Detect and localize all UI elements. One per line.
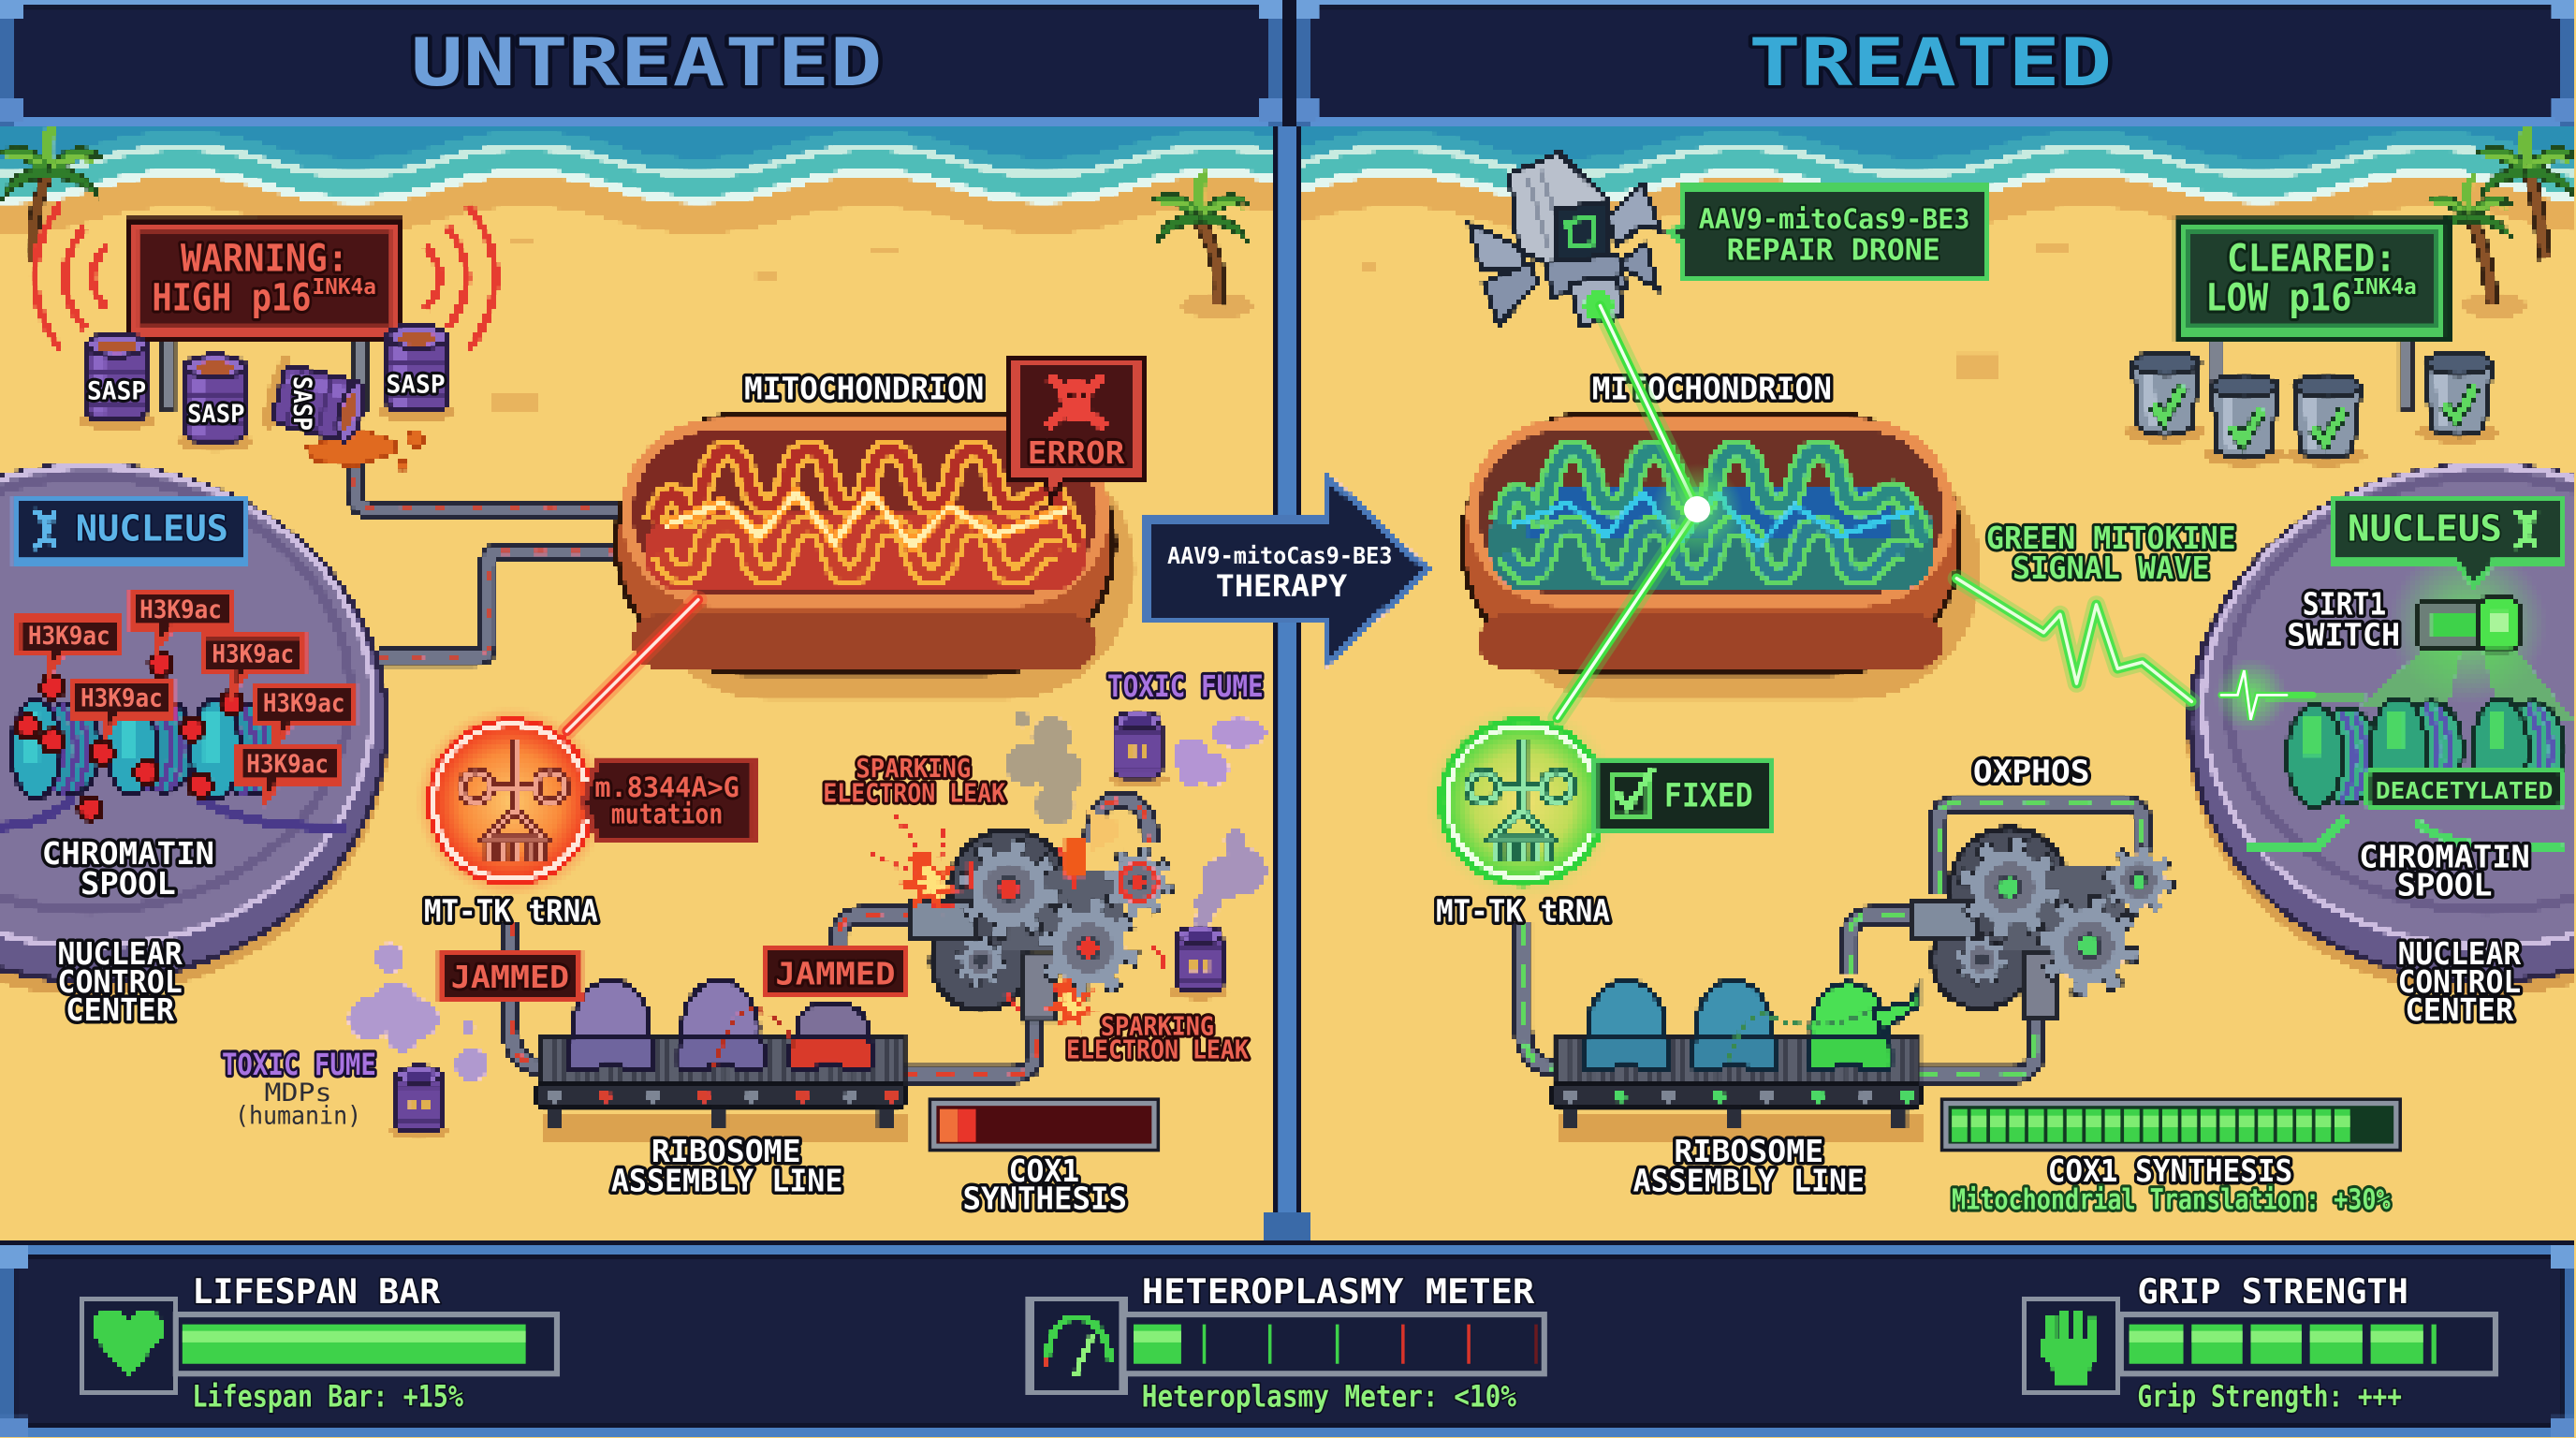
chromatin spools right [2247,698,2565,849]
repair drone label [1669,187,1986,279]
cleared sign text: CLEARED: [2227,237,2396,281]
fixed badge [1595,759,1771,829]
palm tree right of untreated beach [1151,169,1253,318]
nucleus label text right: NUCLEUS [2348,507,2502,550]
MT-TK label right: MT-TK tRNA [1436,893,1610,930]
SASP barrels [77,326,457,453]
ribosome label right: ASSEMBLY LINE [1633,1162,1865,1198]
red warning signal arcs [35,204,495,350]
palm tree top left [0,122,102,263]
chromatin spool label left: CHROMATIN [42,835,214,872]
SASP barrel labels: SASP [386,371,446,399]
H3K9ac labels: H3K9ac [28,623,110,651]
ribosome label right: RIBOSOME [1674,1133,1823,1169]
fixed label: FIXED [1664,777,1753,815]
signal pulse inside nucleus [2221,670,2313,720]
grip strength bar [2121,1314,2496,1373]
SASP barrel labels [87,371,446,431]
ribosome assembly conveyor right [1551,1036,1924,1144]
toxic fume MDPs label left: MDPs [265,1079,332,1108]
toxic fume MDPs label left [222,1049,376,1130]
ribosome assembly conveyor left [535,1036,909,1144]
nuclear control center label left: CENTER [66,991,175,1028]
ribosome label left: ASSEMBLY LINE [611,1162,842,1198]
gear output pipes left [840,800,1150,1075]
jammed badge two [766,948,907,996]
H3K9ac labels: H3K9ac [80,685,163,713]
H3K9ac labels [28,596,345,779]
green mitokine label [1986,520,2236,586]
SIRT1 green beams [2215,546,2576,731]
sparking electron leak label bottom [1066,1013,1249,1064]
lifespan text: Lifespan Bar: +15% [192,1380,463,1414]
repaired tRNA circle [1425,703,1621,901]
heteroplasmy text: HETEROPLASMY METER [1142,1271,1535,1312]
nucleus label left [15,498,245,562]
left header banner [0,0,1288,128]
red damage on gears [929,846,1157,1010]
green mitokine label: SIGNAL WAVE [2012,550,2210,586]
cleared sign text: INK4a [2352,275,2417,300]
toxic fume barrel and clouds left [348,943,488,1139]
therapy text: AAV9-mitoCas9-BE3 [1167,542,1392,569]
jammed labels: JAMMED [451,959,569,995]
SIRT1 switch label: SWITCH [2287,617,2400,653]
ocean and surf, untreated side [0,126,1273,234]
sparking electron leak label top [823,755,1006,808]
nucleus dome right [2187,465,2576,996]
jammed labels: JAMMED [775,955,896,991]
centre divider [1265,128,1311,1245]
sparking electron leak label top: ELECTRON LEAK [823,779,1006,808]
COX1 synthesis label right: Mitochondrial Translation: +30% [1952,1184,2391,1217]
ribosome label left: RIBOSOME [651,1133,801,1169]
cleared buckets [2124,352,2499,466]
nuclear control center label left: CONTROL [57,963,183,1000]
lifespan text: LIFESPAN BAR [192,1271,441,1312]
grip strength text [2137,1271,2408,1414]
toxic fume barrel and smoke right [1170,829,1266,1000]
nucleus label right [2333,498,2563,585]
jammed badge one [440,951,580,999]
green mitokine label: GREEN MITOKINE [1986,520,2236,556]
H3K9ac labels: H3K9ac [246,751,329,779]
nuclear control center label right: CENTER [2405,991,2514,1028]
repair impact flash [1651,463,1743,555]
H3K9ac labels: H3K9ac [139,596,222,624]
therapy text: THERAPY [1216,568,1348,604]
green mitokine signal wave [1956,579,2191,701]
sparking electron leak burst top [871,814,964,915]
heading treated: TREATED [1749,24,2112,101]
green repair beam to tRNA [1558,509,1697,718]
mitochondrion label right: MITOCHONDRION [1592,370,1832,406]
nuclear control center label right: NUCLEAR [2398,935,2522,972]
drone label text: AAV9-mitoCas9-BE3 [1699,203,1969,235]
SASP pipe to mitochondrion [355,463,618,509]
warning sign text [152,237,376,320]
grip strength text: Grip Strength: +++ [2137,1380,2402,1414]
SASP barrel labels: SASP [187,401,245,429]
SASP barrel labels: SASP [87,377,146,405]
tRNA pipe to ribosomes left [511,923,550,1068]
heart icon [82,1299,176,1392]
warning sign text: INK4a [312,275,376,300]
lifespan bar [176,1314,557,1373]
error label: ERROR [1028,434,1125,471]
chromatin spool label left: SPOOL [80,865,176,902]
heteroplasmy text [1142,1271,1535,1414]
gear cluster right [1910,829,2168,1019]
crisp status bars layer [176,1099,2496,1373]
nuclear control center label right: CONTROL [2398,963,2521,1000]
therapy arrow [1147,477,1427,662]
oxphos pipes right [1850,803,2143,1075]
heteroplasmy bar [1123,1314,1544,1373]
tRNA pipe to ribosomes right [1523,923,1560,1068]
jammed labels [451,955,896,995]
COX1 synthesis label right: COX1 SYNTHESIS [2048,1152,2292,1189]
warning sign text: HIGH p16 [152,276,312,320]
heteroplasmy text: Heteroplasmy Meter: <10% [1142,1380,1516,1414]
repair drone [1469,153,1661,326]
SIRT1 toggle switch [2417,598,2520,651]
mutation label [594,771,739,829]
warning sign text: WARNING: [181,237,348,281]
chromatin spool label right [2359,839,2530,903]
H3K9ac tag bubbles [18,592,355,801]
drone label text: REPAIR DRONE [1727,233,1940,267]
SIRT1 switch label: SIRT1 [2303,585,2386,622]
gear cluster left [910,829,1167,1020]
nucleus dome left [0,465,389,996]
drone label text [1699,203,1969,267]
ribosomes right [1584,979,1919,1070]
ribosome label right [1633,1133,1865,1198]
sparking electron leak label bottom: SPARKING [1101,1013,1214,1042]
sand specks [493,238,2070,411]
nuclear control center label left [57,935,183,1028]
lifespan text [192,1271,463,1414]
mutation label: mutation [611,798,723,829]
COX1 label left [962,1152,1127,1217]
heading untreated: UNTREATED [411,24,882,101]
MT-TK label left: MT-TK tRNA [424,893,598,930]
cleared sign posts [2210,335,2413,411]
mutation label: m.8344A>G [594,771,739,803]
orange sparking fire [1064,809,1120,877]
grip strength text: GRIP STRENGTH [2137,1271,2408,1312]
deacetylated badge [2367,769,2561,809]
COX1 label left: COX1 [1009,1152,1079,1189]
gauge icon [1030,1299,1123,1392]
ribosomes left [568,979,872,1070]
nuclear signal pipe [378,552,618,657]
mutated tRNA circle [416,707,607,897]
spilled SASP fluid [305,419,424,470]
toxic fume label top: TOXIC FUME [1107,670,1264,704]
grey smoke [1005,712,1083,825]
sparking electron leak label bottom: ELECTRON LEAK [1066,1035,1249,1064]
COX1 bar treated [1942,1099,2400,1151]
red mutation beam [567,600,698,731]
mutation label box [583,759,754,840]
right header banner [1288,0,2576,128]
beams above text [567,305,2313,731]
toxic fume barrel and clouds top right [1107,712,1266,787]
toxic fume MDPs label left: TOXIC FUME [222,1049,376,1082]
ribosome label left [611,1133,842,1198]
acetyl red dots [17,653,243,820]
SIRT1 switch label [2287,585,2400,653]
mitochondrion label left: MITOCHONDRION [744,370,984,406]
sparking electron leak label top: SPARKING [856,755,971,784]
mitochondrion untreated [616,414,1135,700]
SASP barrel labels: SASP [287,376,315,431]
cleared sign text: LOW p16 [2205,276,2351,320]
H3K9ac labels: H3K9ac [263,690,345,718]
H3K9ac labels: H3K9ac [212,640,294,668]
chromatin spools left [0,697,345,827]
cleared sign text [2205,237,2417,320]
COX1 synthesis label right [1952,1152,2391,1217]
cleared sign board [2177,220,2448,339]
palm trees treated beach [2424,122,2576,318]
warning sign posts [161,335,366,411]
chromatin spool label right: SPOOL [2397,867,2492,903]
chromatin spool label right: CHROMATIN [2359,839,2530,875]
mRNA strand right [1728,1010,1873,1060]
ocean and surf, treated side [1301,126,2574,230]
COX1 bar untreated [929,1099,1158,1151]
mRNA strand left [714,1009,795,1068]
deacetylated label: DEACETYLATED [2376,777,2553,804]
COX1 label left: SYNTHESIS [962,1181,1127,1217]
nuclear control center label right [2398,935,2522,1028]
warning sign board [128,220,401,339]
nucleus label text left: NUCLEUS [76,507,228,550]
toxic fume MDPs label left: (humanin) [235,1102,361,1130]
therapy text [1167,542,1392,604]
fist icon [2024,1299,2117,1392]
chromatin spool label left [42,835,214,902]
sparking electron leak burst bottom [1042,945,1164,1033]
oxphos label: OXPHOS [1973,753,2089,789]
green repair beam from drone [1600,305,1697,509]
bottom status panel [0,1240,2576,1438]
error sign with skull [1009,357,1144,500]
mitochondrion treated [1462,414,1982,700]
nuclear control center label left: NUCLEAR [57,935,183,972]
